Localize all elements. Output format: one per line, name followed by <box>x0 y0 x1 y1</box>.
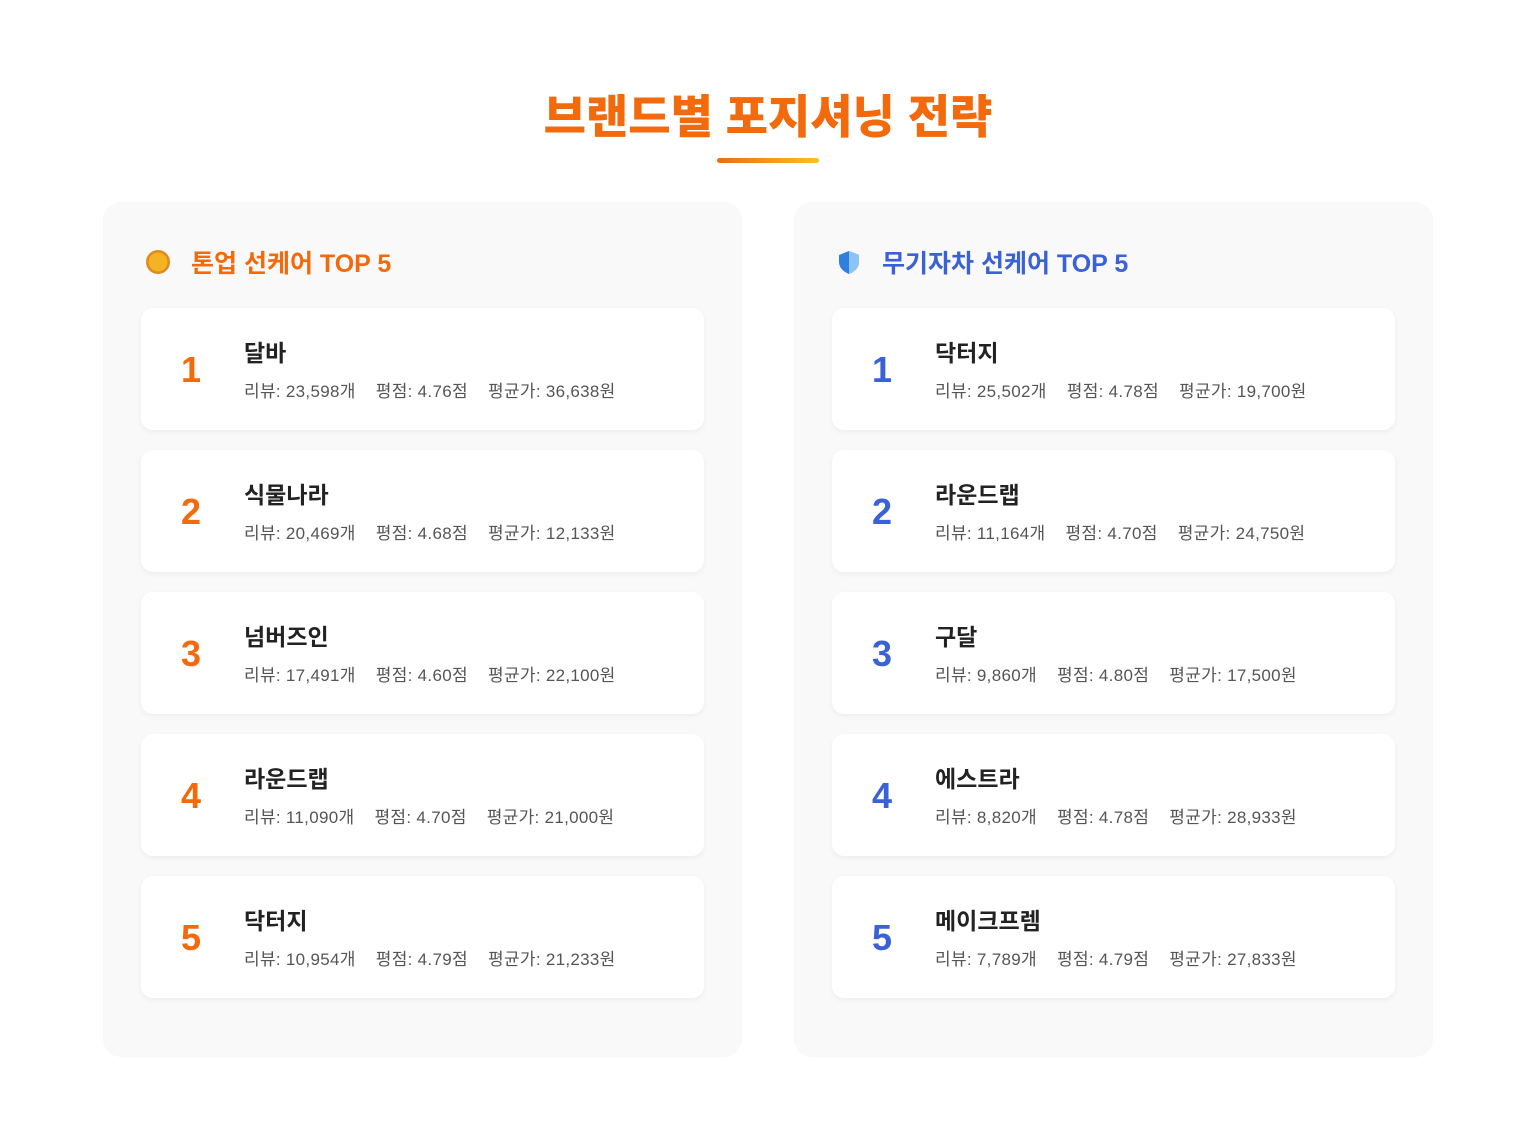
card 2 <box>832 450 1395 572</box>
card 4: 4 <box>181 775 201 816</box>
card 2: 식물나라 <box>244 482 329 508</box>
card 2: 리뷰: 20,469개 평점: 4.68점 평균가: 12,133원 <box>244 524 616 543</box>
card 4: 에스트라 <box>935 766 1020 792</box>
card 1: 리뷰: 25,502개 평점: 4.78점 평균가: 19,700원 <box>935 382 1307 401</box>
card 3: 리뷰: 17,491개 평점: 4.60점 평균가: 22,100원 <box>244 666 616 685</box>
card 3 <box>141 592 704 714</box>
card 3: 3 <box>181 633 201 674</box>
title underline <box>717 158 819 163</box>
card 1: 리뷰: 23,598개 평점: 4.76점 평균가: 36,638원 <box>244 382 616 401</box>
card 4: 라운드랩 <box>244 766 329 792</box>
card 5: 5 <box>181 917 201 958</box>
card 4: 4 <box>872 775 892 816</box>
card 4: 리뷰: 8,820개 평점: 4.78점 평균가: 28,933원 <box>935 808 1297 827</box>
card 3 <box>832 592 1395 714</box>
card 5 <box>141 876 704 998</box>
heading: tone-up: 톤업 선케어 TOP 5 <box>191 250 391 278</box>
card 2: 라운드랩 <box>935 482 1020 508</box>
card 4: 리뷰: 11,090개 평점: 4.70점 평균가: 21,000원 <box>244 808 614 827</box>
card 3: 3 <box>872 633 892 674</box>
card 2: 2 <box>872 491 892 532</box>
card 4 <box>141 734 704 856</box>
card 3: 구달 <box>935 624 977 650</box>
card 5 <box>832 876 1395 998</box>
card 1: 1 <box>872 349 892 390</box>
panel: tone-up suncare <box>103 202 742 1057</box>
panel: mineral suncare <box>794 202 1433 1057</box>
card 2 <box>141 450 704 572</box>
card 5: 리뷰: 10,954개 평점: 4.79점 평균가: 21,233원 <box>244 950 616 969</box>
card 5: 리뷰: 7,789개 평점: 4.79점 평균가: 27,833원 <box>935 950 1297 969</box>
card 4 <box>832 734 1395 856</box>
card 5: 5 <box>872 917 892 958</box>
card 1: 달바 <box>244 340 286 366</box>
card 1 <box>832 308 1395 430</box>
card 1: 닥터지 <box>935 340 998 366</box>
card 5: 메이크프렘 <box>935 908 1041 934</box>
card 2: 리뷰: 11,164개 평점: 4.70점 평균가: 24,750원 <box>935 524 1305 543</box>
heading: mineral: 무기자차 선케어 TOP 5 <box>882 250 1128 278</box>
card 3: 리뷰: 9,860개 평점: 4.80점 평균가: 17,500원 <box>935 666 1297 685</box>
title: 브랜드별 포지셔닝 전략 <box>544 91 992 143</box>
card 5: 닥터지 <box>244 908 307 934</box>
card 1: 1 <box>181 349 201 390</box>
card 1 <box>141 308 704 430</box>
card 2: 2 <box>181 491 201 532</box>
card 3: 넘버즈인 <box>244 624 329 650</box>
